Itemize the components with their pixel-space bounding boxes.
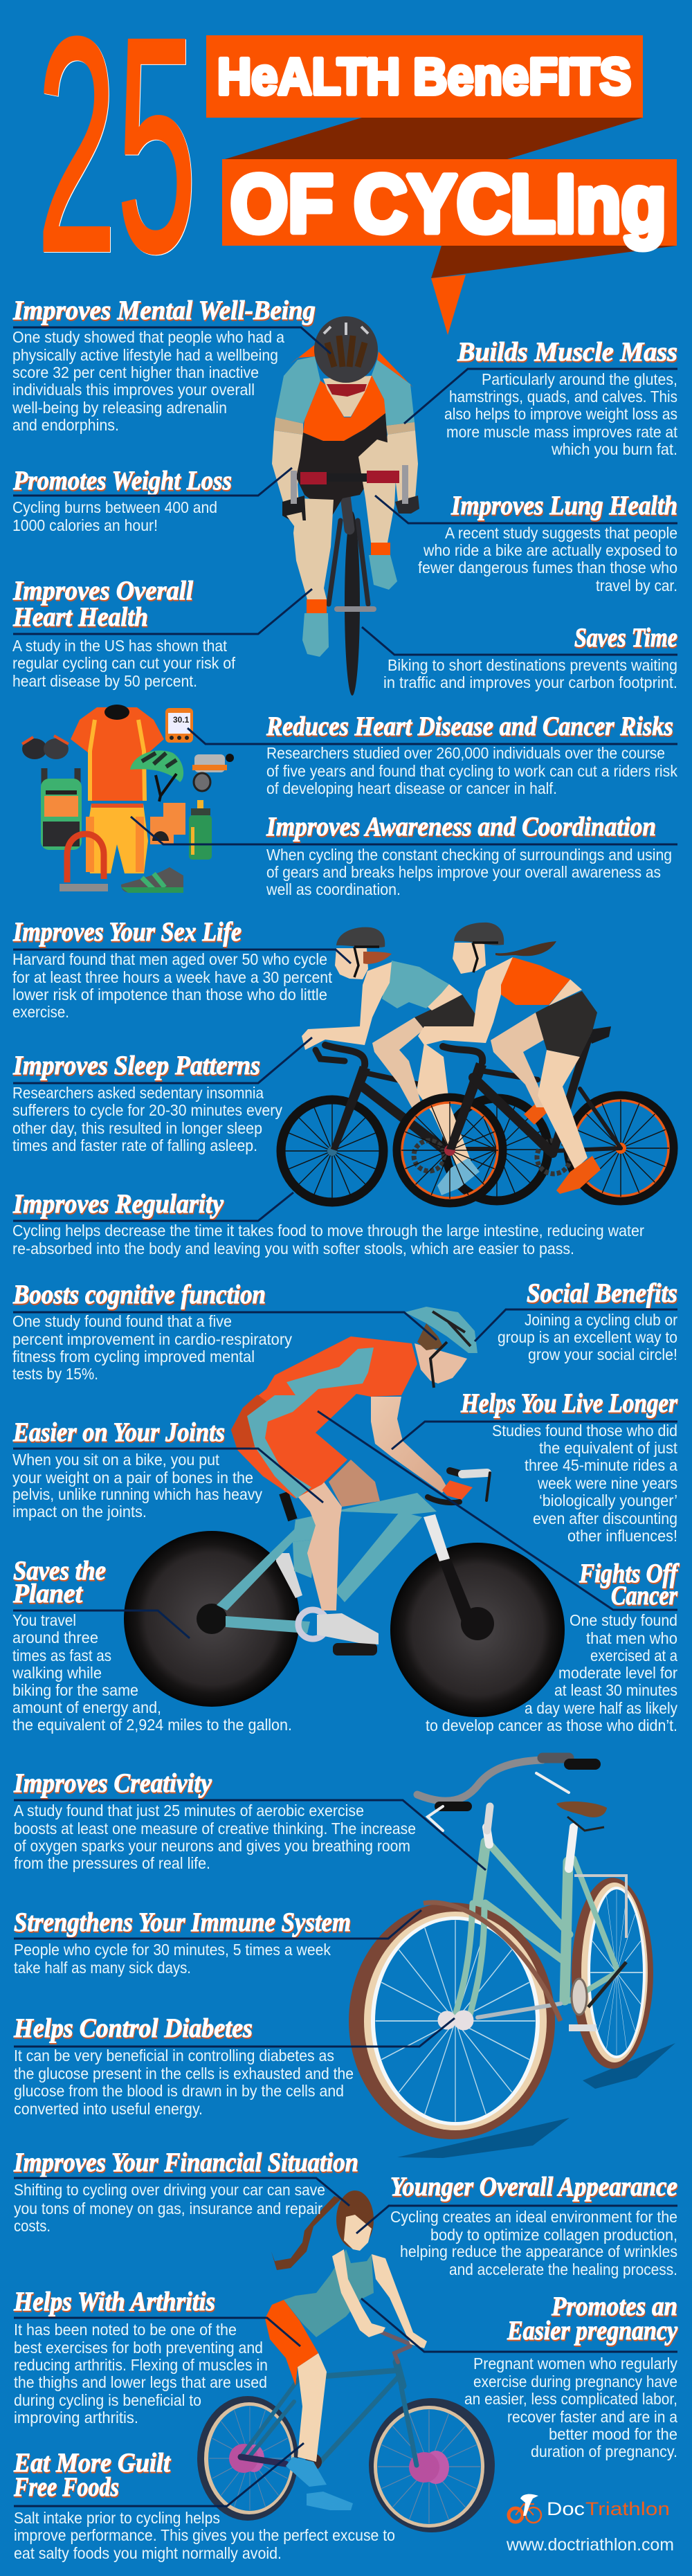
benefit: Builds Muscle Mass [404, 337, 678, 458]
benefit: Improves Your Sex Life [12, 917, 351, 1021]
body text: of gears and breaks helps improve your overall awareness as [266, 863, 661, 881]
illustration: cyclist front view [272, 316, 419, 696]
heading: Fights Off [579, 1559, 680, 1588]
icon: bike lock [60, 834, 108, 891]
body text: eat salty foods you might normally avoid. [14, 2544, 282, 2562]
body text [426, 1611, 677, 1734]
body text: impact on the joints. [12, 1503, 147, 1521]
fender and rack [424, 1876, 626, 2021]
body text: the glucose present in the cells is exhausted and the [14, 2065, 354, 2083]
illustration: two cyclists [281, 923, 673, 1203]
ribbon folds [225, 118, 677, 335]
body text: week were nine years [537, 1474, 677, 1492]
body text: body to optimize collagen production, [430, 2226, 677, 2244]
body text [418, 524, 677, 595]
body text: It can be very beneficial in controlling diabetes as [14, 2047, 334, 2065]
rider head and helmet [405, 1307, 477, 1388]
rider jersey and shorts [231, 1336, 417, 1498]
body text: sufferers to cycle for 20-30 minutes every [12, 1101, 282, 1119]
ground shadows [397, 2043, 675, 2158]
body text: duration of pregnancy. [531, 2442, 677, 2460]
illustration: cycling gear [22, 705, 234, 893]
body text: percent improvement in cardio-respiratory [12, 1330, 292, 1348]
body text: well-being by releasing adrenalin [12, 399, 227, 417]
body text: pelvis, unlike running which has heavy [12, 1485, 262, 1503]
body text: Pregnant women who regularly [473, 2355, 677, 2373]
body text: even after discounting [533, 1509, 677, 1527]
leader line [188, 728, 677, 744]
illustration: racing cyclist side view [124, 1307, 565, 1717]
wheel and frame: right rider [397, 1040, 621, 1203]
body text: around three [12, 1629, 98, 1647]
benefit: Social Benefits [475, 1278, 677, 1363]
body text: heart disease by 50 percent. [12, 672, 197, 690]
saddle [556, 1802, 607, 1831]
leader line [362, 627, 677, 655]
benefit: Improves Regularity [12, 1189, 644, 1258]
body text: amount of energy and, [12, 1698, 161, 1716]
body text: from the pressures of real life. [14, 1854, 210, 1872]
rider: orange top [418, 923, 611, 1194]
body text [14, 2047, 354, 2118]
benefit: Saves the Planet [12, 1556, 292, 1734]
ribbon: Health Benefits: HeALTH BeneFITS [217, 48, 631, 105]
body text: times as fast as [12, 1647, 111, 1665]
heading: Free Foods [13, 2472, 119, 2502]
benefit: Helps You Live Longer [392, 1388, 678, 1545]
body text [14, 1802, 416, 1872]
body text: Researchers asked sedentary insomnia [12, 1084, 264, 1102]
body text: better mood for the [549, 2425, 677, 2443]
wordmark: Triathlon [585, 2498, 670, 2519]
body text: travel by car. [596, 577, 677, 595]
body text: One study showed that people who had a [12, 328, 284, 346]
rider: teal top [302, 927, 480, 1195]
head and hair [271, 2190, 374, 2270]
body text: helping reduce the appearance of wrinkles [400, 2242, 677, 2260]
body text: other influences! [567, 1527, 677, 1545]
body text: Shifting to cycling over driving your car can save [14, 2181, 325, 2199]
body text: Researchers studied over 260,000 individuals over the course [266, 744, 665, 762]
heading [12, 576, 193, 632]
icon: green helmet [130, 750, 183, 801]
body text: times and faster rate of falling asleep. [12, 1136, 257, 1154]
leader line [13, 950, 351, 963]
rear foot and seat post [276, 1493, 377, 1656]
body text: score 32 per cent higher than inactive [12, 363, 259, 381]
leader line [356, 2206, 677, 2233]
body text: ‘biologically younger’ [539, 1491, 677, 1509]
body text: People who cycle for 30 minutes, 5 times a week [14, 1941, 331, 1959]
body text [383, 656, 677, 691]
body text [14, 2181, 325, 2235]
helmet [314, 316, 378, 383]
body text [14, 1941, 331, 1977]
body text: When you sit on a bike, you put [12, 1451, 220, 1469]
body text [12, 637, 236, 690]
body text: who ride a bike are actually exposed to [423, 541, 677, 559]
leader line [375, 496, 677, 523]
leader line [13, 327, 331, 354]
body text: and endorphins. [12, 416, 119, 434]
leader line [13, 468, 292, 496]
arms [332, 2249, 427, 2348]
leader line [13, 1037, 312, 1083]
body text: best exercises for both preventing and [14, 2339, 263, 2357]
handlebars [417, 1758, 595, 1831]
body text: exercise. [12, 1003, 69, 1021]
heading: Easier on Your Joints [12, 1417, 225, 1447]
benefit: Helps With Arthritis [13, 2287, 300, 2427]
leader line [404, 369, 677, 424]
disc wheels [124, 1531, 565, 1717]
heading: Eat More Guilt [13, 2448, 171, 2478]
body text: Harvard found that men aged over 50 who cycle [12, 950, 327, 968]
rider legs [297, 1460, 380, 1644]
body text: moderate level for [558, 1664, 677, 1682]
legs and shoes [293, 439, 397, 657]
legs and shoes [286, 2353, 353, 2510]
heading: Saves the [13, 1556, 106, 1586]
body text: A study in the US has shown that [12, 637, 228, 655]
leader line [14, 2443, 304, 2506]
fork and hub [439, 1903, 561, 2029]
benefit: Saves Time [362, 623, 677, 691]
body text: walking while [12, 1664, 102, 1682]
heading: Promotes Weight Loss [12, 466, 232, 496]
body text: Studies found those who did [492, 1422, 677, 1440]
body text: It has been noted to be one of the [14, 2321, 237, 2339]
body text: grow your social circle! [528, 1345, 677, 1363]
icon: cycling shoe [121, 867, 183, 893]
icon: bike bell [192, 754, 234, 791]
body text: well as coordination. [266, 880, 401, 898]
body text [444, 370, 678, 458]
body text: re-absorbed into the body and leaving you with softer stools, which are easier to pass. [12, 1240, 574, 1258]
front wheel [349, 1903, 555, 2139]
heading: Strengthens Your Immune System [14, 1907, 351, 1937]
heading: Cancer [611, 1581, 678, 1611]
crank and pedal [569, 1962, 626, 2031]
body text [14, 2509, 395, 2562]
benefit: Improves Overall Heart Health [12, 576, 312, 690]
body text: group is an excellent way to [498, 1328, 677, 1346]
heading: Improves Creativity [13, 1768, 212, 1798]
leader line [392, 1422, 677, 1449]
body text: the thighs and lower legs that are used [14, 2373, 267, 2391]
leader line [13, 1611, 190, 1638]
body text: in traffic and improves your carbon footprint. [383, 673, 677, 691]
icon: water bottle [189, 800, 212, 860]
bike frame [241, 2325, 417, 2465]
body text: One study found [570, 1611, 677, 1629]
leader line [318, 1411, 677, 1610]
heading: Improves Overall [12, 576, 193, 606]
body text: to develop cancer as those who didn’t. [426, 1716, 677, 1734]
body text: exercised at a [590, 1647, 677, 1665]
logo: DocTriathlon [506, 2494, 674, 2555]
body text: You travel [12, 1611, 76, 1629]
illustration: mint vintage bicycle [349, 1758, 675, 2158]
leader line [14, 2178, 349, 2206]
shoulders and jersey [272, 345, 418, 516]
body text: three 45-minute rides a [525, 1456, 677, 1474]
heading: Helps With Arthritis [13, 2287, 215, 2316]
leader line [13, 589, 312, 634]
heading [13, 2448, 171, 2502]
heading: Improves Mental Well-Being [12, 296, 316, 325]
hubs [229, 2444, 449, 2484]
body text [12, 1084, 282, 1154]
heading [579, 1559, 680, 1611]
benefit: Improves Sleep Patterns [12, 1037, 312, 1154]
body text: Joining a cycling club or [525, 1311, 677, 1329]
body text: lower risk of impotence than those who do little [12, 986, 327, 1004]
rear wheels [281, 1096, 673, 1202]
body text: that men who [586, 1629, 677, 1647]
benefit: Boosts cognitive function [12, 1280, 437, 1383]
leader line [14, 1800, 486, 1870]
benefit: Promotes an Easier pregnancy [361, 2292, 678, 2460]
body text [498, 1311, 677, 1363]
heading: Improves Regularity [12, 1189, 224, 1219]
leader line [14, 1910, 421, 1939]
body text: for at least three hours a week have a 30 percent [12, 968, 333, 986]
heading: Improves Sleep Patterns [12, 1051, 260, 1080]
body text [12, 498, 217, 534]
heading: Improves Your Sex Life [12, 917, 242, 947]
website url: www.doctriathlon.com [506, 2535, 674, 2555]
heading: Boosts cognitive function [12, 1280, 266, 1309]
body text: costs. [14, 2217, 51, 2235]
leader line [14, 2318, 300, 2346]
body text: tests by 15%. [12, 1365, 98, 1383]
heading [507, 2292, 678, 2346]
body text: 1000 calories an hour! [12, 516, 158, 534]
body text: you tons of money on gas, insurance and repair [14, 2199, 322, 2217]
body text: fitness from cycling improved mental [12, 1348, 255, 1366]
ribbon: Health Benefits [206, 35, 643, 118]
body text: regular cycling can cut your risk of [12, 654, 236, 672]
body text: Cycling creates an ideal environment for the [390, 2208, 677, 2226]
heading: Heart Health [12, 602, 148, 632]
handlebar [428, 1471, 490, 1503]
body text: recover faster and are in a [507, 2408, 677, 2426]
body text [390, 2208, 677, 2278]
benefit: Reduces Heart Disease and Cancer Risks [188, 711, 677, 797]
body text: take half as many sick days. [14, 1959, 191, 1977]
icon: bike computer [165, 708, 193, 743]
chainring gears [414, 1141, 570, 1174]
leader line [13, 1192, 293, 1221]
body text: Biking to short destinations prevents waiting [388, 656, 677, 674]
benefit: Easier on Your Joints [12, 1417, 323, 1521]
body text: the equivalent of just [539, 1439, 678, 1457]
body text: of oxygen sparks your neurons and gives you breathing room [14, 1837, 410, 1855]
body text: at least 30 minutes [554, 1681, 677, 1699]
body text: fewer dangerous fumes than those who [418, 559, 677, 577]
body text: Cycling burns between 400 and [12, 498, 217, 516]
heading [12, 1556, 106, 1608]
body text: boosts at least one measure of creative thinking. The increase [14, 1820, 416, 1838]
body text: during cycling is beneficial to [14, 2391, 201, 2409]
icon: cyclist logo [509, 2494, 541, 2523]
body text: the equivalent of 2,924 miles to the gallon. [12, 1716, 292, 1734]
body text [492, 1422, 678, 1545]
body text: A study found that just 25 minutes of aerobic exercise [14, 1802, 364, 1820]
heading: Promotes an [551, 2292, 677, 2321]
bike frame [217, 1493, 476, 1639]
benefit: Promotes Weight Loss [12, 466, 292, 534]
body text: a day were half as likely [525, 1699, 677, 1717]
heading: Improves Your Financial Situation [13, 2148, 358, 2177]
benefit: Improves Awareness and Coordination [131, 812, 677, 898]
heading: Planet [12, 1579, 83, 1608]
heading: Builds Muscle Mass [457, 337, 677, 367]
body text [12, 950, 333, 1021]
heading: Improves Awareness and Coordination [266, 812, 656, 842]
benefit: Strengthens Your Immune System [14, 1907, 421, 1977]
body text [464, 2355, 677, 2460]
body text: Salt intake prior to cycling helps [14, 2509, 220, 2527]
body text: One study found found that a five [12, 1312, 232, 1330]
body text: which you burn fat. [551, 440, 677, 458]
body text: Cycling helps decrease the time it takes food to move through the large intestine, reducing water [12, 1222, 644, 1240]
benefit: Improves Lung Health [375, 491, 677, 595]
leader line [131, 817, 677, 844]
body text: improving arthritis. [14, 2409, 138, 2427]
bike seen from the front [329, 484, 374, 696]
rear wheel [572, 1878, 653, 2069]
body text [266, 744, 677, 797]
body text: physically active lifestyle had a wellbeing [12, 346, 278, 364]
body text [12, 1451, 262, 1521]
body text: glucose from the blood is drawn in by the cells and [14, 2082, 344, 2100]
body text: improve performance. This gives you the perfect excuse to [14, 2526, 395, 2544]
tank top [284, 2249, 374, 2337]
body text: also helps to improve weight loss as [444, 405, 677, 423]
body text: Particularly around the glutes, [482, 370, 677, 388]
heading: Social Benefits [527, 1278, 677, 1308]
body text [12, 328, 284, 434]
icon: sunglasses [22, 736, 69, 759]
leader line [14, 2018, 455, 2047]
benefit: Helps Control Diabetes [13, 2013, 455, 2118]
benefit: Improves Your Financial Situation [13, 2148, 358, 2235]
body text: reducing arthritis. Flexing of muscles in [14, 2356, 268, 2374]
icon: jersey [71, 705, 164, 801]
shorts [265, 2300, 318, 2386]
benefit: Improves Mental Well-Being [12, 296, 331, 434]
leader line [475, 1309, 677, 1341]
benefit: Younger Overall Appearance [356, 2172, 677, 2278]
icon: shorts [86, 804, 148, 873]
body text [12, 1222, 644, 1258]
bike frame [477, 1806, 618, 2001]
body text: individuals this improves your overall [12, 381, 255, 399]
body text: other day, this resulted in longer sleep [12, 1119, 262, 1137]
bike frame: left rider [316, 1045, 495, 1151]
body text: an easier, less complicated labor, [464, 2390, 677, 2408]
body text [12, 1611, 292, 1734]
benefit: Improves Creativity [13, 1768, 486, 1872]
benefit: Fights Off Cancer [318, 1411, 680, 1734]
body text: your weight on a pair of bones in the [12, 1469, 253, 1487]
body text: biking for the same [12, 1681, 138, 1699]
wordmark [547, 2498, 670, 2519]
handlebar and hands [282, 384, 419, 526]
leader line [13, 1312, 437, 1340]
leader line [361, 2298, 677, 2352]
rider arm and glove [371, 1397, 473, 1500]
icon: backpack [41, 768, 82, 850]
body text: A recent study suggests that people [445, 524, 677, 542]
leader line [13, 1449, 323, 1503]
body text [14, 2321, 268, 2427]
body text [266, 846, 672, 898]
body text [12, 1312, 292, 1383]
body text: converted into useful energy. [14, 2100, 203, 2118]
icon: gloves [150, 803, 185, 844]
heading: Helps Control Diabetes [13, 2013, 253, 2043]
body text: of developing heart disease or cancer in half. [266, 779, 557, 797]
illustration: woman on bicycle [197, 2190, 495, 2532]
body text: more muscle mass improves rate at [446, 423, 678, 441]
icon: bike computer: 30.1 [173, 715, 190, 725]
wheels [197, 2396, 495, 2532]
title banner [37, 0, 677, 335]
wordmark: Doc [547, 2498, 585, 2519]
benefit: Eat More Guilt Free Foods [13, 2443, 395, 2562]
